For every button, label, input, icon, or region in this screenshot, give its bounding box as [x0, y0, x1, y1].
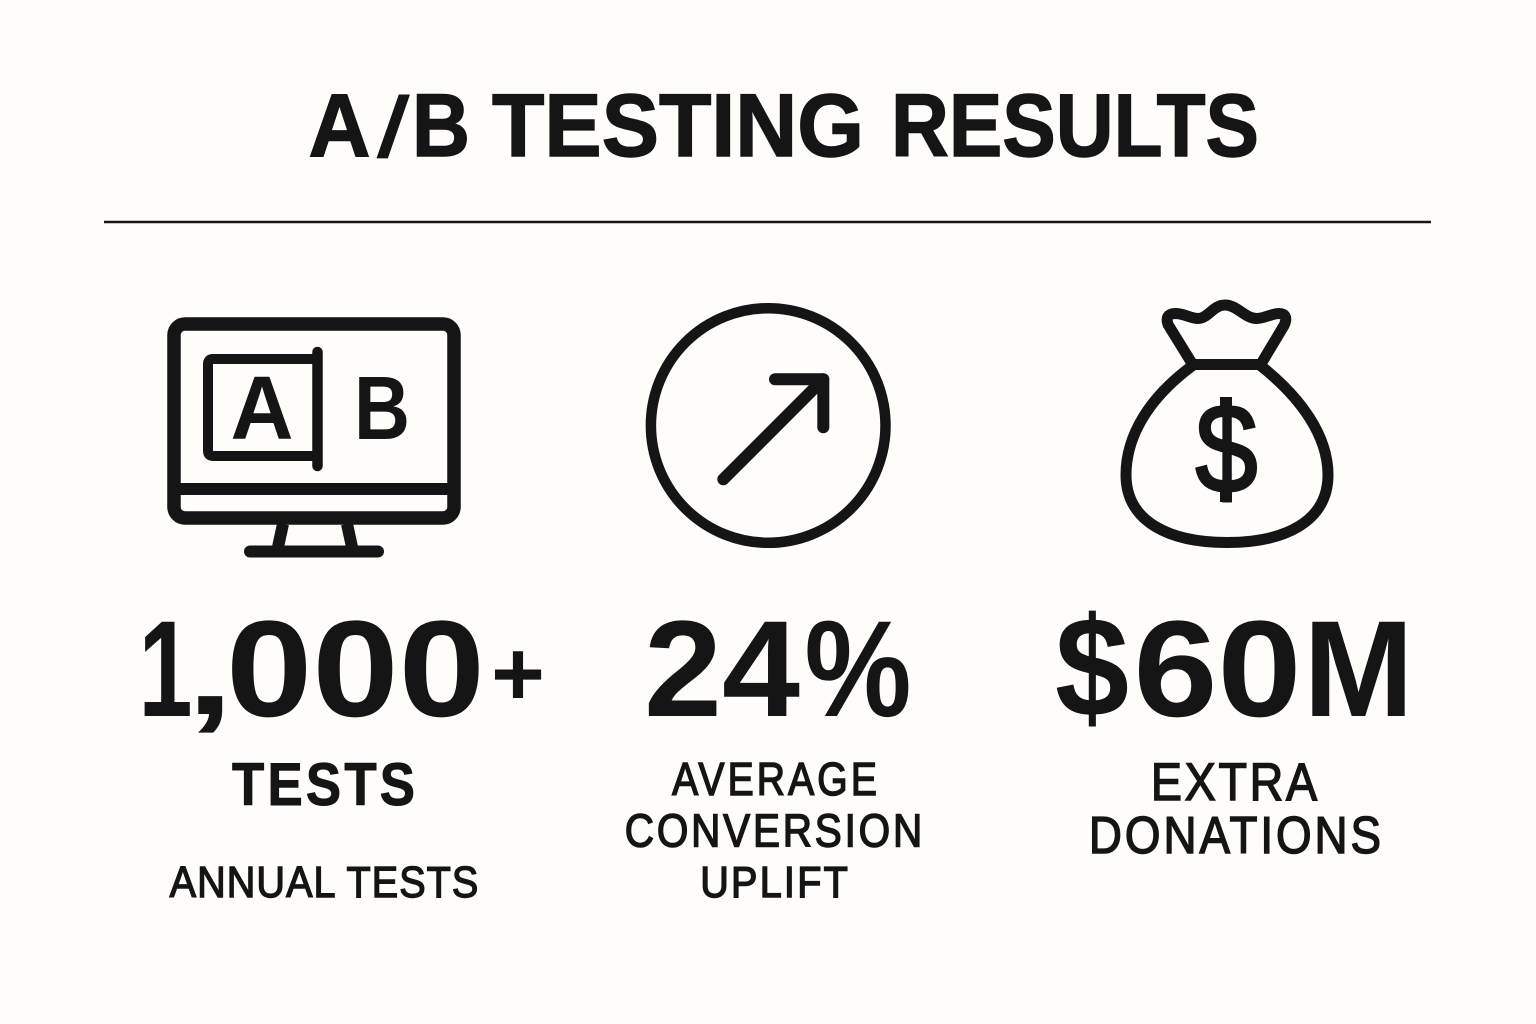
stat: 24%	[644, 593, 912, 746]
stat: $60M: M	[1304, 593, 1414, 746]
stat: $60M: 60	[1134, 593, 1302, 746]
label: annual tests: ANNUAL TESTS	[170, 857, 478, 906]
title: A	[308, 75, 370, 175]
icon: monitor with A/B test: B	[354, 359, 410, 459]
title: /	[374, 79, 412, 174]
icon: circle with upward arrow	[651, 308, 886, 543]
label: average conversion uplift: CONVERSION	[625, 806, 922, 857]
stat: 24%: %	[804, 593, 912, 746]
label: average conversion uplift	[625, 754, 922, 906]
title: B	[412, 75, 470, 175]
stat: 1,000+	[138, 593, 545, 746]
stat: 1,000+: ,	[186, 606, 234, 740]
stat: 1,000+: +	[491, 623, 545, 725]
label: extra donations	[1089, 752, 1381, 865]
label: average conversion uplift: AVERAGE	[672, 754, 877, 806]
title: RESULTS	[891, 75, 1259, 175]
icon: monitor with A/B test	[174, 324, 454, 552]
icon: money bag	[1126, 305, 1328, 542]
stat: 24%: 24	[644, 593, 800, 746]
label: extra donations: DONATIONS	[1089, 807, 1381, 865]
stat: 1,000+: 000	[226, 593, 485, 746]
icon: monitor with A/B test: A	[230, 359, 294, 459]
title	[308, 75, 1259, 175]
stat: $60M: $	[1055, 588, 1129, 747]
stat: $60M	[1055, 588, 1414, 747]
title: TESTING	[492, 75, 864, 175]
icon: money bag: $	[1196, 378, 1258, 519]
stat: 1,000+: 1	[138, 593, 192, 746]
label: average conversion uplift: UPLIFT	[700, 857, 848, 906]
label: extra donations: EXTRA	[1151, 752, 1318, 812]
label: tests: TESTS	[232, 751, 415, 818]
